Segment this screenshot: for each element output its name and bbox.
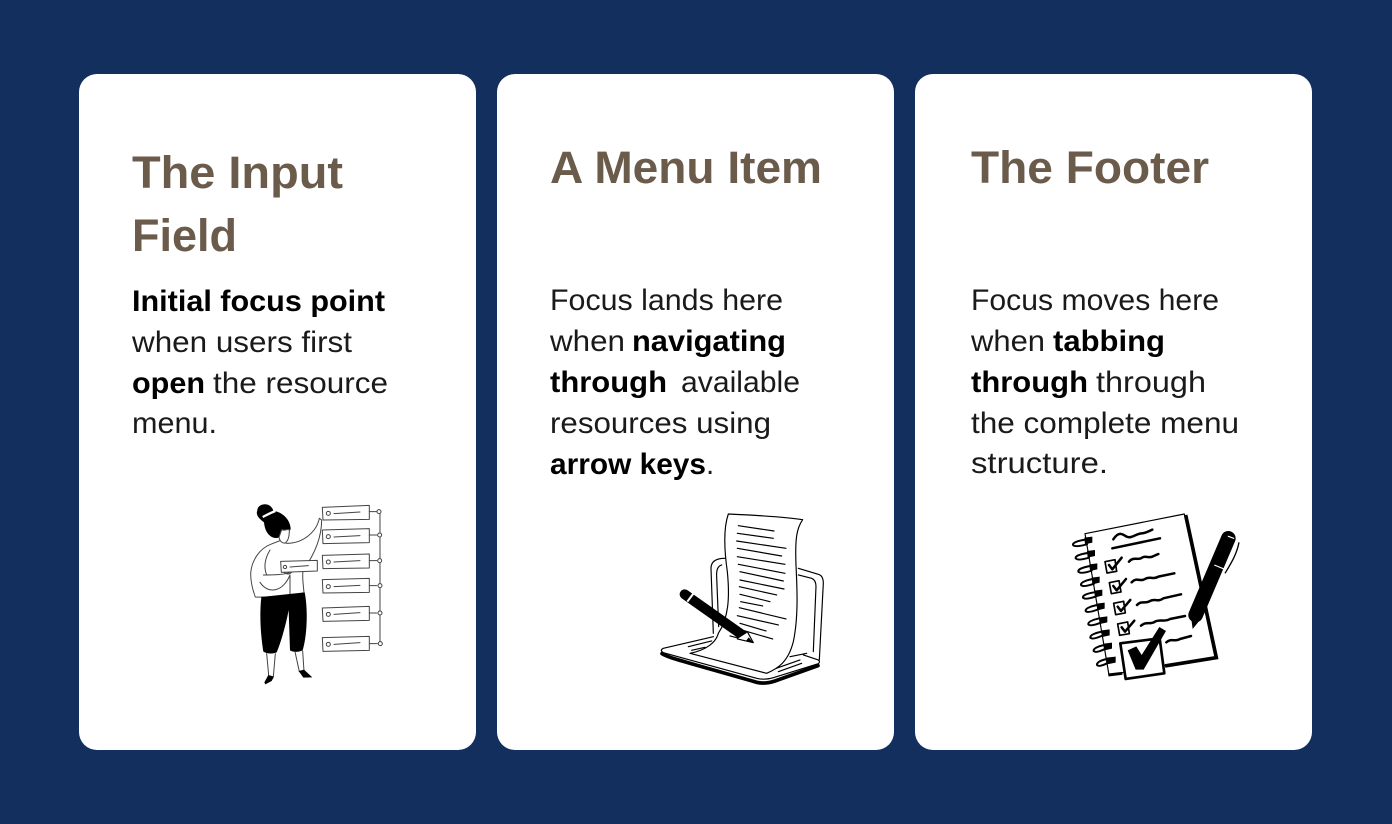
text block: input field description: when users first <box>131 326 352 359</box>
text block: input field description <box>131 285 388 440</box>
text block: footer description: when <box>970 325 1045 358</box>
text block: footer description: the complete menu <box>971 407 1239 440</box>
icon: woman arranging input fields <box>251 504 382 684</box>
icon: laptop with paper and pen <box>661 514 823 683</box>
face <box>279 530 289 543</box>
panel: the footer <box>915 74 1312 750</box>
text block: menu item description: through <box>550 366 667 399</box>
text block: input field description: the resource <box>213 367 388 400</box>
pen <box>685 594 743 636</box>
text block: menu item description: available <box>681 366 800 399</box>
heading: the input field: The Input <box>132 147 343 198</box>
text block: input field description: open <box>132 367 205 400</box>
held field <box>281 560 317 572</box>
spiral binding <box>1073 537 1116 666</box>
text block: footer description <box>970 284 1239 480</box>
text block: menu item description: Focus lands here <box>550 284 783 317</box>
text block: menu item description <box>549 284 800 481</box>
icon: spiral notebook checklist and pen <box>1073 514 1239 679</box>
title squiggle <box>1112 530 1160 548</box>
text block: footer description: through <box>971 366 1088 399</box>
pen <box>1196 538 1228 615</box>
checklist rows <box>1105 554 1191 642</box>
hair <box>257 504 291 538</box>
heading: a menu item: A Menu Item <box>550 142 822 193</box>
legs and shoes <box>267 651 304 677</box>
large checkbox <box>1120 638 1164 679</box>
text block: footer description: Focus moves here <box>971 284 1219 317</box>
text block: menu item description: . <box>706 448 714 481</box>
heading: the input field: Field <box>132 210 237 261</box>
text block: footer description: through <box>1096 366 1206 399</box>
text block: input field description: Initial focus point <box>132 285 385 318</box>
text block: input field description: menu. <box>132 407 217 440</box>
trousers <box>260 592 307 654</box>
text block: footer description: tabbing <box>1053 325 1165 358</box>
text block: menu item description: navigating <box>632 325 786 358</box>
heading: the footer: The Footer <box>971 142 1209 193</box>
sweater <box>251 518 322 597</box>
panel: the input field <box>79 74 476 750</box>
text block: footer description: structure. <box>971 447 1108 480</box>
text block: menu item description: when <box>549 325 625 358</box>
text block: menu item description: arrow keys <box>550 448 706 481</box>
heading: the input field <box>132 147 343 261</box>
panel: a menu item <box>497 74 894 750</box>
text block: menu item description: resources using <box>550 407 771 440</box>
